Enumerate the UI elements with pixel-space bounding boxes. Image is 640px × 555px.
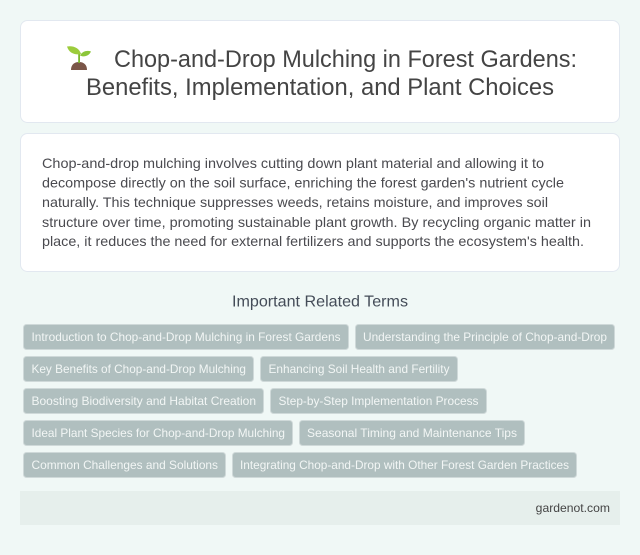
footer source text: gardenot.com xyxy=(536,501,610,515)
tag xyxy=(24,420,292,446)
tag: Seasonal Timing and Maintenance Tips xyxy=(307,426,517,440)
tag xyxy=(24,324,348,350)
panel: related term tags xyxy=(24,324,614,478)
tag: Introduction to Chop-and-Drop Mulching in Forest Gardens xyxy=(32,330,340,344)
tag: Enhancing Soil Health and Fertility xyxy=(268,362,450,376)
tag: Integrating Chop-and-Drop with Other Forest Garden Practices xyxy=(240,458,569,472)
tag: Understanding the Principle of Chop-and-Drop xyxy=(363,330,607,344)
panel: title header xyxy=(20,20,620,122)
icon: seedling xyxy=(67,46,91,70)
description text: Chop-and-drop mulching involves cutting down plant material and allowing it to xyxy=(42,155,544,171)
heading: important related terms: Important Related Terms xyxy=(232,294,408,310)
title line 1: Chop-and-Drop Mulching in Forest Gardens: xyxy=(114,46,577,73)
tag xyxy=(300,420,524,446)
tag xyxy=(260,356,458,382)
tag: Ideal Plant Species for Chop-and-Drop Mulching xyxy=(32,426,285,440)
title line 2: Benefits, Implementation, and Plant Choices xyxy=(86,74,554,101)
tag xyxy=(24,388,264,414)
tag xyxy=(24,356,254,382)
panel: footer xyxy=(20,491,620,525)
description text: place, it reduces the need for external fertilizers and supports the ecosystem's health. xyxy=(42,233,584,249)
description text xyxy=(42,155,591,249)
tag xyxy=(356,324,614,350)
tag: Boosting Biodiversity and Habitat Creation xyxy=(32,394,256,408)
tag xyxy=(24,452,226,478)
description text: structure over time, promoting sustainable plant growth. By recycling organic matter in xyxy=(42,214,591,230)
tag xyxy=(270,388,486,414)
description text: decompose directly on the soil surface, enriching the forest garden's nutrient cycle xyxy=(42,174,564,190)
tag: Step-by-Step Implementation Process xyxy=(278,394,478,408)
panel: description xyxy=(20,134,620,272)
tag: Common Challenges and Solutions xyxy=(32,458,218,472)
tag xyxy=(232,452,576,478)
description text: naturally. This technique suppresses weeds, retains moisture, and improves soil xyxy=(42,194,548,210)
tag: Key Benefits of Chop-and-Drop Mulching xyxy=(32,362,246,376)
